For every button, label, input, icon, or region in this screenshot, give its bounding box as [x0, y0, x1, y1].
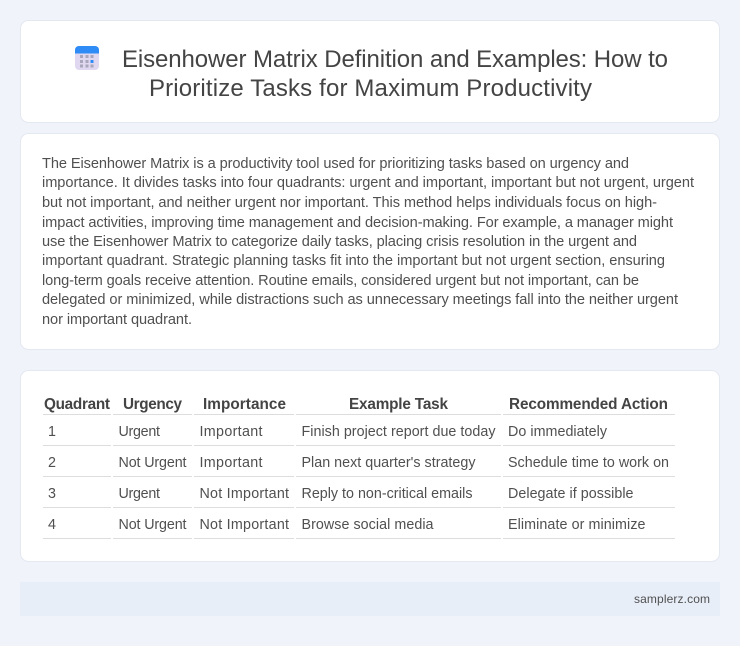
footer: samplerz.com	[634, 592, 710, 606]
table header	[44, 396, 668, 413]
table row 1: Finish project report due today	[302, 424, 496, 440]
table header: Urgency	[123, 396, 182, 413]
text block: description paragraph: use the Eisenhower Matrix to categorize daily tasks, placing crisis resolution in the urgent and	[42, 234, 637, 250]
table row 4: Not Urgent	[118, 517, 187, 533]
text block: description paragraph: importance. It divides tasks into four quadrants: urgent and important, important but not urgent, urgent	[42, 175, 694, 191]
table row 1: Important	[200, 424, 263, 440]
table header: Example Task	[349, 396, 448, 413]
table row 2: Plan next quarter's strategy	[302, 455, 476, 471]
text block: description paragraph: long-term goals receive attention. Routine emails, considered urgent but not important, can be	[42, 273, 639, 289]
table row 4: Browse social media	[302, 517, 434, 533]
heading	[122, 46, 668, 102]
heading: Prioritize Tasks for Maximum Productivity	[149, 75, 592, 102]
text block: description paragraph: The Eisenhower Matrix is a productivity tool used for prioritizing tasks based on urgency and	[42, 156, 629, 172]
panel: description	[20, 134, 720, 350]
table row 3	[48, 486, 634, 502]
table row 2: 2	[48, 455, 56, 471]
icon: calendar	[75, 46, 99, 70]
table header: Importance	[203, 396, 286, 413]
panel: title	[20, 20, 720, 122]
table row 4: Eliminate or minimize	[508, 517, 646, 533]
footer	[20, 582, 720, 616]
text block: description paragraph: but not important, and neither urgent nor important. This method helps individuals focus on high-	[42, 195, 657, 211]
table row 4: Not Important	[200, 517, 289, 533]
text block: description paragraph	[42, 156, 694, 328]
heading: Eisenhower Matrix Definition and Examples: How to	[122, 46, 668, 73]
text block: description paragraph: nor important quadrant.	[42, 312, 192, 328]
table row 3: 3	[48, 486, 56, 502]
table row 2	[48, 455, 669, 471]
table row 3: Urgent	[118, 486, 160, 502]
table row 4: 4	[48, 517, 56, 533]
table header: Quadrant	[44, 396, 110, 413]
table row 1	[48, 424, 608, 440]
table row 1: 1	[48, 424, 56, 440]
table row 1: Urgent	[118, 424, 160, 440]
table row 2: Not Urgent	[118, 455, 187, 471]
panel: table	[20, 370, 720, 562]
table row 2: Important	[200, 455, 263, 471]
table header: Recommended Action	[509, 396, 668, 413]
table row 3: Delegate if possible	[508, 486, 634, 502]
text block: description paragraph: important quadrant. Strategic planning tasks fit into the important but not urgent section, ensuring	[42, 253, 665, 269]
table row 3: Not Important	[200, 486, 289, 502]
table row 4	[48, 517, 646, 533]
text block: description paragraph: delegated or minimized, while distractions such as unnecessary meetings fall into the neither urgent	[42, 292, 678, 308]
text block: description paragraph: impact activities, improving time management and decision-making. For example, a manager might	[42, 215, 673, 231]
table row 2: Schedule time to work on	[508, 455, 669, 471]
table row 3: Reply to non-critical emails	[302, 486, 472, 502]
table row 1: Do immediately	[508, 424, 608, 440]
